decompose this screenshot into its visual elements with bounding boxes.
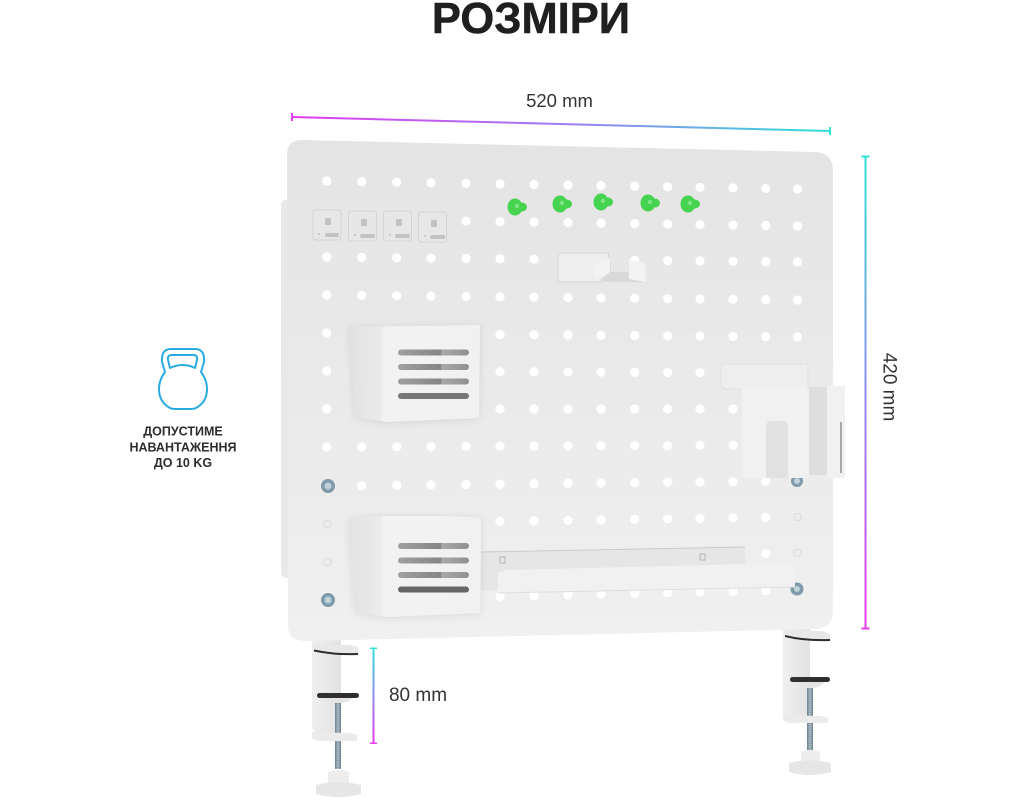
cup holder bbox=[721, 364, 845, 478]
green pegs bbox=[508, 194, 700, 216]
key hook tiles bbox=[313, 210, 446, 242]
right clamp bbox=[783, 625, 831, 775]
double hook bbox=[558, 253, 646, 282]
lower basket bbox=[349, 516, 481, 617]
pegboard panel bbox=[281, 140, 833, 641]
dimension: width 520 mm: 520 mm bbox=[526, 90, 593, 111]
dimension: width 520 mm bbox=[291, 90, 831, 135]
rear plate bbox=[281, 200, 290, 578]
capacity text: НАВАНТАЖЕННЯ bbox=[129, 440, 237, 454]
dimension: clamp 80 mm: 80 mm bbox=[389, 685, 447, 706]
capacity text bbox=[129, 424, 237, 470]
lower tray bbox=[481, 547, 795, 593]
left clamp bbox=[312, 640, 361, 797]
icon: kettlebell bbox=[159, 349, 207, 409]
upper basket bbox=[350, 325, 480, 422]
dimension: height 420 mm: 420 mm bbox=[878, 353, 900, 421]
load capacity callout bbox=[129, 349, 237, 470]
front panel bbox=[287, 140, 833, 641]
capacity text: ДОПУСТИМЕ bbox=[143, 424, 223, 438]
tile details bbox=[318, 218, 445, 239]
peg holes bbox=[322, 176, 802, 604]
bolts bbox=[321, 475, 804, 607]
faint blind holes bbox=[324, 513, 801, 566]
dimension: clamp 80 mm bbox=[370, 648, 447, 744]
capacity text: ДО 10 KG bbox=[154, 456, 212, 470]
